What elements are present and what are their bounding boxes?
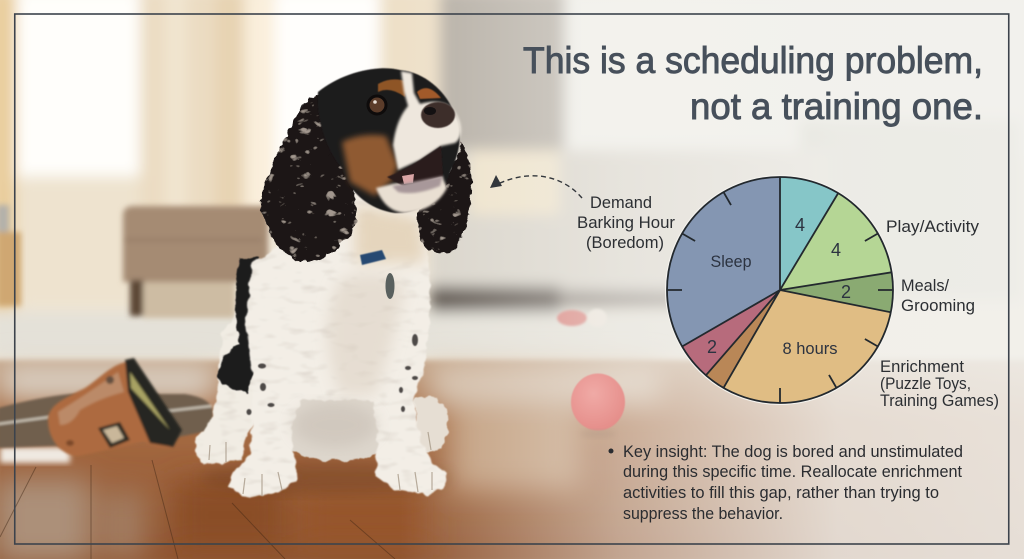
slice: meals [780,272,893,312]
dark back patch [218,258,262,392]
dog [194,68,472,498]
ball [571,374,625,438]
tan eyebrows [378,79,408,97]
key insight text: Key insight: The dog is bored and unstimulated [623,443,963,461]
eye [368,96,386,114]
arrow to dog [490,175,582,198]
title [523,40,983,127]
pie labels: Enrichment [880,358,964,376]
slice: enrichment [724,290,891,403]
slice: play [780,193,892,290]
treat pouch [48,358,182,456]
leash [0,394,213,448]
mouth [387,146,443,187]
rear haunch left [194,290,262,464]
pie chart: 2 [707,337,717,357]
label: demand barking hour [577,194,676,252]
body [230,195,446,498]
translucent veil on right side [400,0,1024,559]
label: demand barking hour: Barking Hour [577,214,676,232]
title: not a training one. [690,86,983,127]
pie chart: Sleep [710,252,752,271]
glare on floor [0,447,70,463]
key insight text [608,443,963,523]
white blaze [393,71,461,170]
paw toes [209,432,432,496]
slice: teal [780,177,838,290]
pie labels: Grooming [901,297,975,315]
pie labels: Training Games) [880,392,999,410]
key insight text: suppress the behavior. [623,505,783,523]
label: demand barking hour: Demand [590,194,652,212]
brown bench [123,206,268,318]
chin [376,176,447,213]
belly [280,380,390,460]
pie chart: 4 [831,240,841,260]
belly shade [293,403,377,447]
tan cheek [342,135,398,196]
pie labels: Play/Activity [886,218,980,236]
pie labels: (Puzzle Toys, [880,375,971,393]
key insight text: activities to fill this gap, rather than trying to [623,484,939,502]
slice: rose [682,290,780,375]
pie chart: 4 [795,215,805,235]
nose [421,102,455,128]
chair at left edge [0,205,21,306]
chest shading [328,205,425,395]
left ear [261,95,356,262]
pie chart [665,175,895,405]
collar and tag [360,250,394,299]
pie chart: 8 hours [782,339,838,358]
key insight text: during this specific time. Reallocate enrichment [623,463,962,481]
title: This is a scheduling problem, [523,40,983,81]
label: demand barking hour: (Boredom) [586,234,664,252]
toy on rug [557,309,607,327]
pie chart: 2 [841,282,851,302]
rear paw right [415,395,448,454]
floorboard lines [0,460,395,559]
slice: sleep [667,177,780,346]
floor shadow [200,462,450,494]
head [318,68,461,213]
right ear [417,142,472,253]
pie labels: Meals/ [901,277,949,295]
slice: brown [706,290,780,388]
pie labels [880,218,999,410]
speckles [246,334,418,415]
